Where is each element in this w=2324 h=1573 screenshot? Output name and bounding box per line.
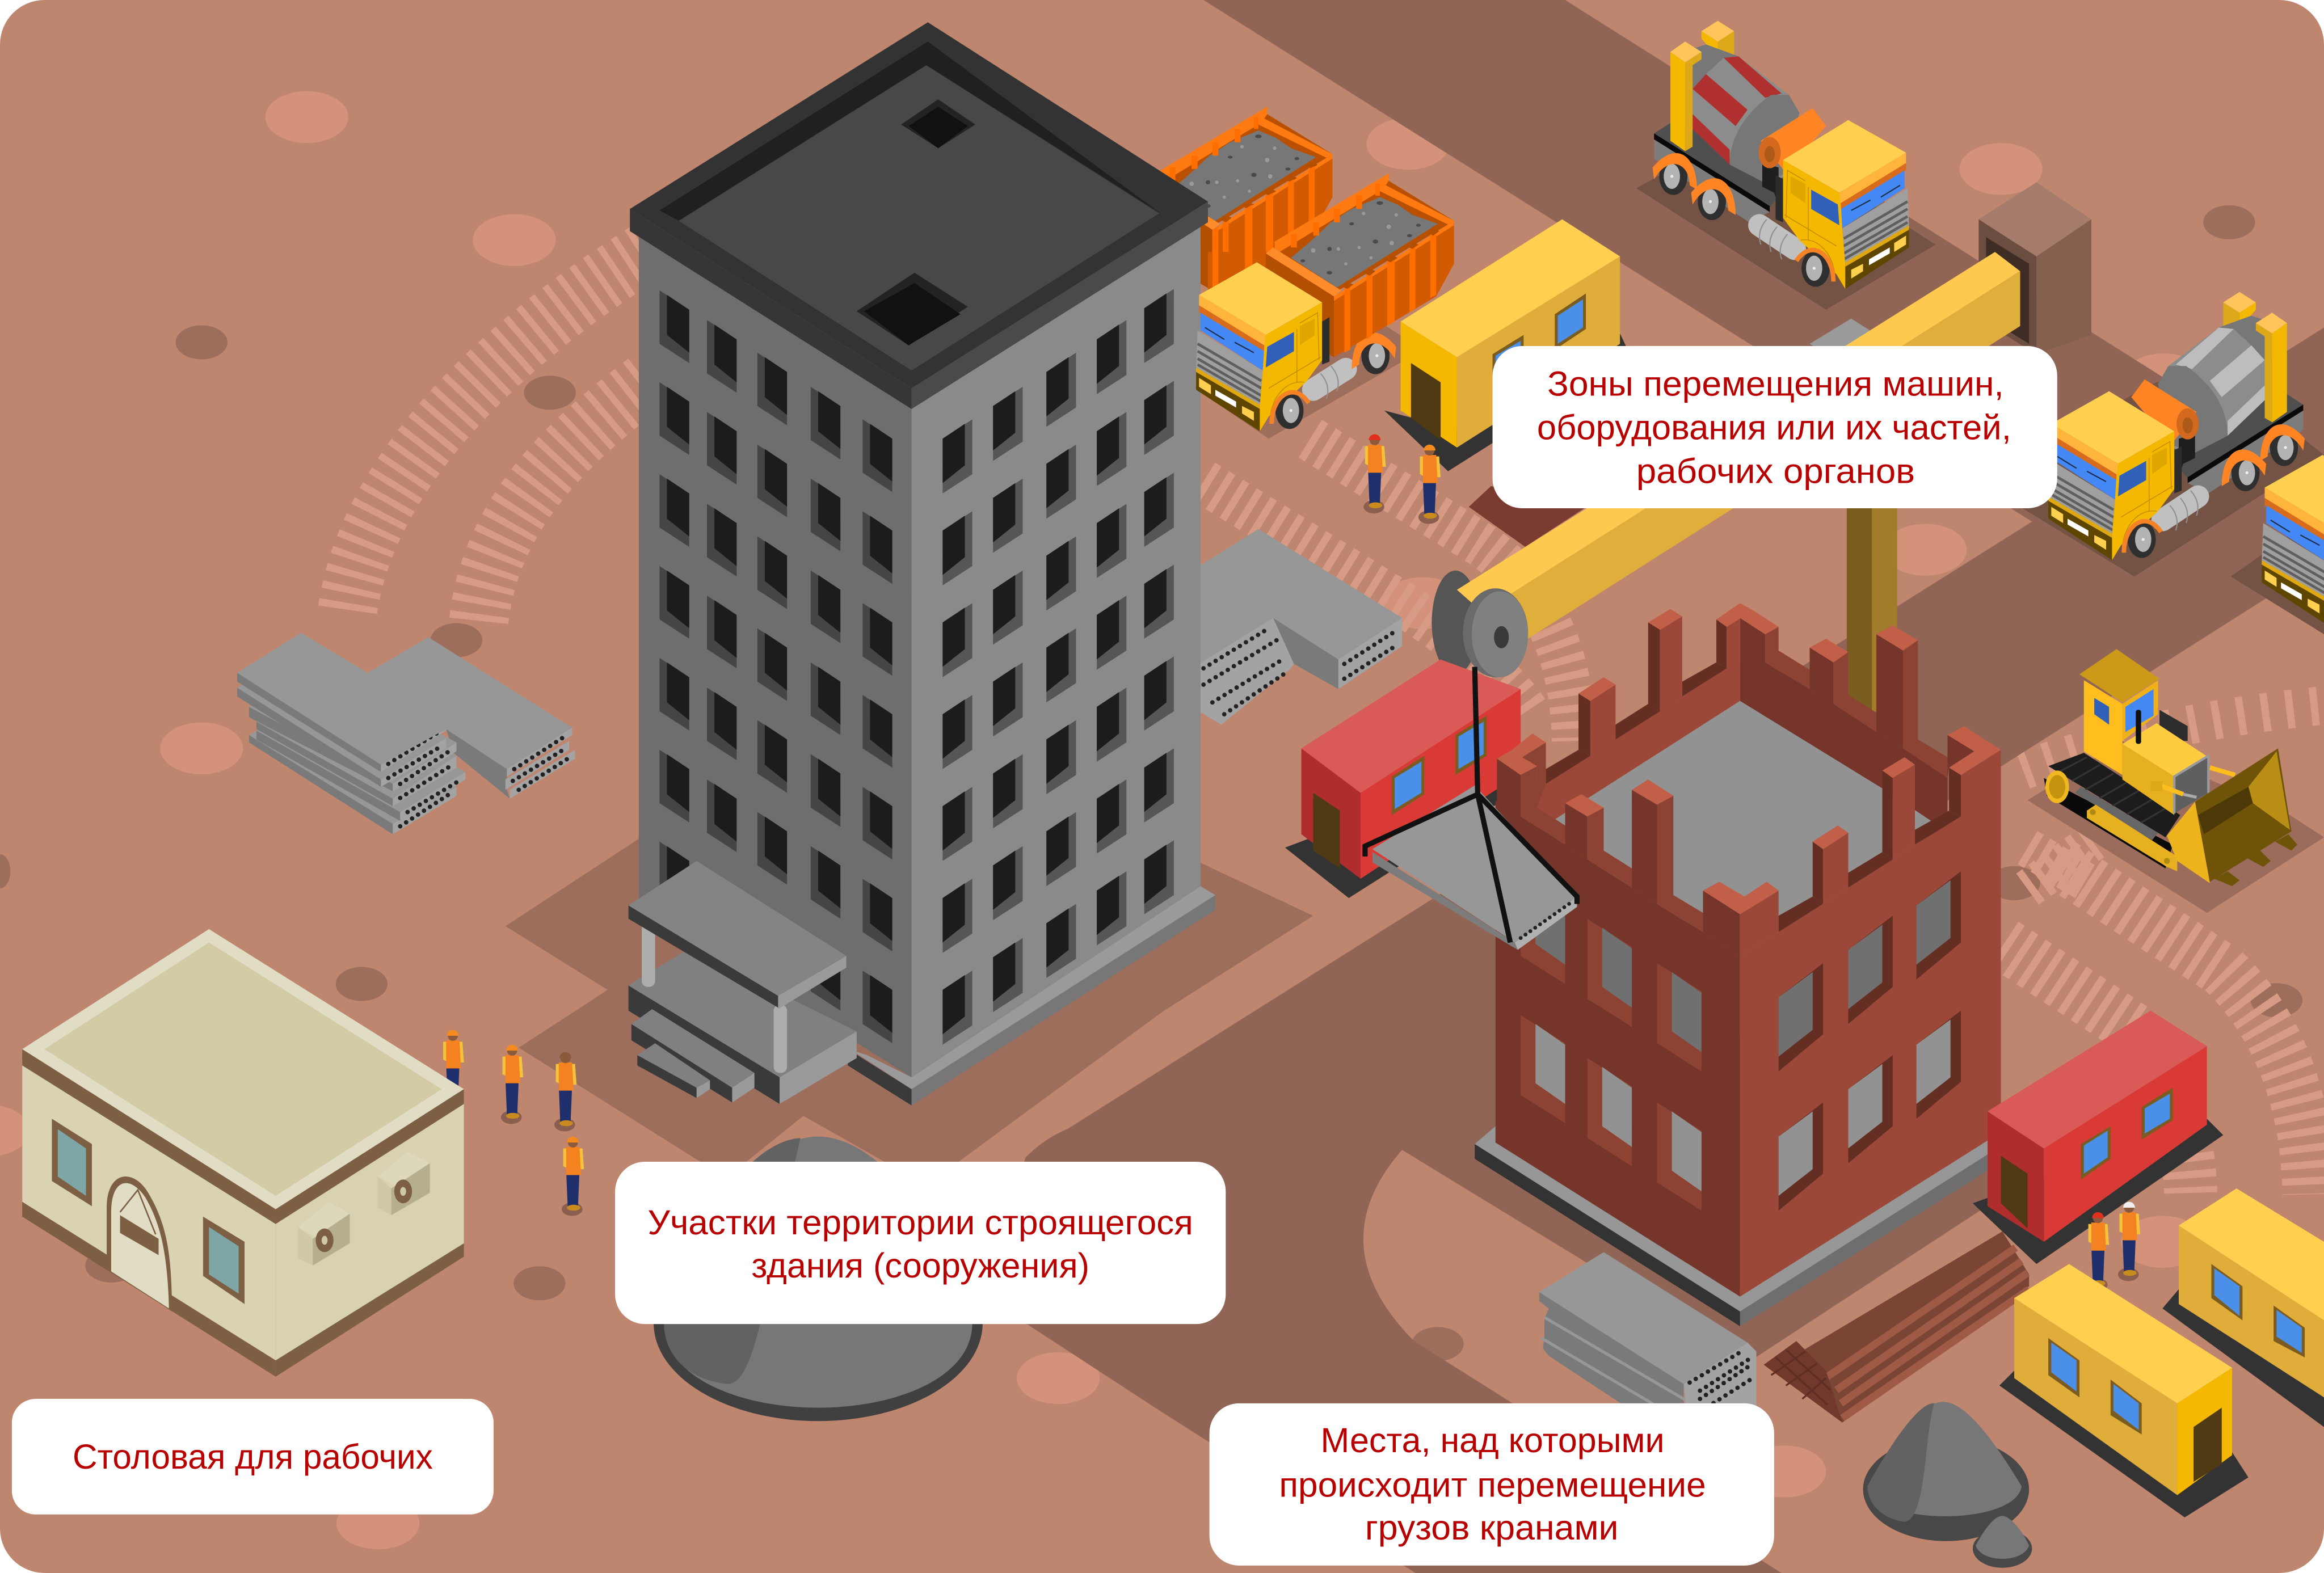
grey cone behind callout (1810, 319, 1891, 370)
front left wall (1496, 800, 1740, 1297)
worker group at canteen (441, 1030, 584, 1216)
red cabin, near crane (1285, 659, 1527, 898)
gravel dome behind callout (654, 1137, 983, 1421)
slab tops (237, 632, 572, 769)
tower right wall (912, 215, 1201, 1077)
workers near yellow cabin (1363, 434, 1441, 524)
canteen windows (52, 1119, 92, 1206)
callout: building site areas: Участки территории строящегося (648, 1203, 1193, 1242)
ground: tower shadow zone (506, 593, 1313, 1186)
brick stack behind callout (1469, 486, 1584, 547)
canteen eave (22, 1049, 276, 1224)
roof hatches (901, 99, 975, 148)
callout: building site areas (615, 1162, 1226, 1324)
workers near red cabin (2087, 1202, 2140, 1292)
rear hydraulic piston (2210, 767, 2235, 775)
cabin right wall (2123, 680, 2158, 741)
tower left wall (639, 222, 912, 1077)
back inner walls (1521, 618, 1947, 859)
canteen door (107, 1176, 172, 1311)
callout: canteen (12, 1399, 494, 1515)
canteen walls (22, 1060, 276, 1360)
dump truck shadow (1194, 304, 1423, 438)
canteen building (22, 929, 464, 1377)
wall openings, upper floor (1521, 871, 1961, 1072)
stacked concrete slabs, left (237, 632, 575, 834)
foundation plate (1475, 1126, 1999, 1326)
yellow cabin, top (1384, 220, 1630, 471)
left stack layers (249, 735, 393, 834)
exhaust pipe (2136, 710, 2141, 744)
back parapet posts (1578, 603, 1918, 756)
right stack (446, 729, 510, 799)
callout: building site areas: здания (сооружения) (751, 1246, 1089, 1285)
concrete floor slab (1555, 701, 1931, 963)
callout: movement zones: Зоны перемещения машин, (1547, 365, 2004, 404)
gravel piles (1863, 1402, 2032, 1568)
tower plinth (912, 895, 1215, 1106)
crane tower mast (1847, 508, 1897, 711)
truck cab, right edge (2262, 455, 2324, 624)
rear corners (1497, 726, 2001, 830)
concrete mixer truck, top (1653, 21, 1909, 289)
ground: building foot zone (1402, 1038, 1993, 1362)
stack of rebar rods (1764, 1232, 2029, 1423)
wall openings, lower floor (1521, 1011, 1961, 1211)
yellow cabin, right rear (2162, 1188, 2324, 1427)
dump truck, front (1196, 174, 1454, 431)
callout: movement zones: рабочих органов (1636, 452, 1915, 491)
blade (2167, 748, 2297, 886)
front hydraulic piston (2150, 781, 2196, 797)
callout: crane load zones: Места, над которыми (1321, 1421, 1665, 1460)
yellow cabin, right front (1999, 1264, 2249, 1517)
tower roof (630, 22, 1208, 388)
engine body (2123, 744, 2174, 815)
tower windows (659, 289, 1174, 1045)
bulldozer (2044, 649, 2297, 886)
bulldozer ground shadow (2028, 741, 2324, 913)
red cabin, lower right (1973, 1011, 2223, 1264)
air conditioner units (298, 1152, 430, 1266)
crane rear pulley (1432, 571, 1479, 674)
stacked concrete slabs, near tower (1199, 529, 1402, 724)
machine housing box (1978, 182, 2091, 354)
tower cornice (630, 209, 912, 409)
parapet strips (1521, 808, 1961, 932)
ground: dark road bands (1014, 0, 2324, 1573)
muffler (2159, 710, 2188, 741)
concrete mixer truck, right (2048, 292, 2305, 560)
crane boom (1457, 252, 2020, 656)
front parapet posts (1565, 757, 1915, 956)
callout: crane load zones: происходит перемещение (1279, 1465, 1706, 1504)
callout: movement zones (1493, 346, 2057, 508)
callout: canteen: Столовая для рабочих (73, 1437, 433, 1477)
tower entrance portico (629, 861, 857, 1104)
hanging concrete slab with cables (1365, 667, 1577, 950)
crane front pulley (1463, 588, 1528, 677)
cabin roof (2079, 649, 2159, 702)
dump truck, rear (1144, 107, 1332, 344)
crawler tracks (2044, 753, 2180, 871)
cabin left wall (2084, 680, 2123, 775)
stacked concrete slabs, bottom (1539, 1252, 1757, 1445)
canteen roof (22, 929, 464, 1209)
callout: crane load zones: грузов кранами (1365, 1508, 1619, 1547)
front right wall (1740, 790, 2001, 1297)
brick building under construction (1475, 603, 2001, 1326)
ground: vehicle tracks (347, 252, 2324, 1195)
truck shadows (1636, 126, 2324, 634)
callout: crane load zones (1210, 1403, 1774, 1566)
callout: movement zones: оборудования или их частей, (1537, 408, 2011, 448)
tower building (630, 22, 1215, 1106)
